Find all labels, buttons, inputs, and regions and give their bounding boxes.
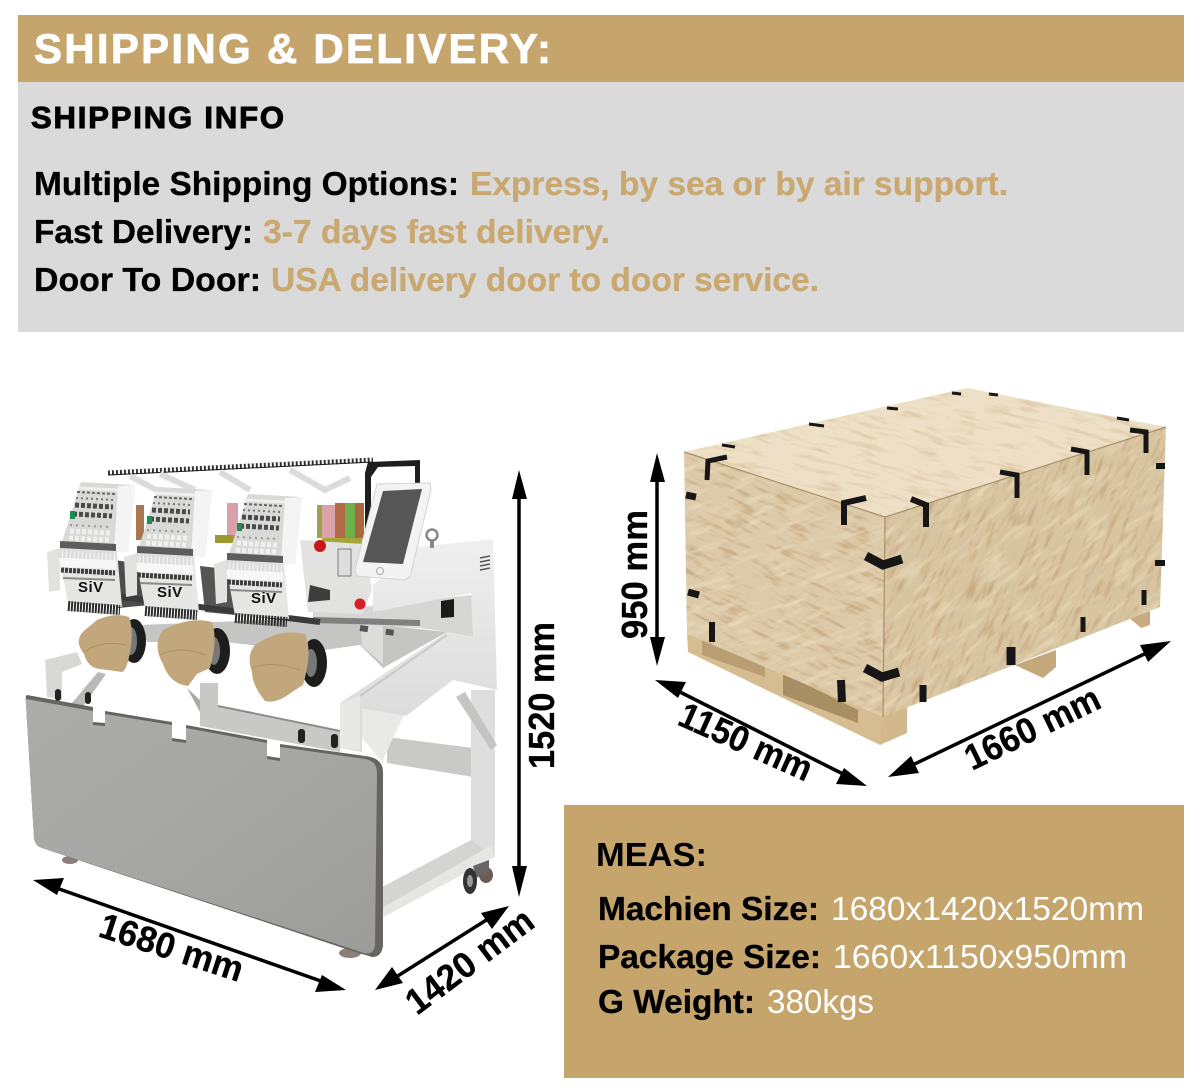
machine right housing bbox=[140, 530, 497, 750]
arrow: height 1520 bbox=[512, 470, 527, 897]
text: gross weight: G Weight: bbox=[598, 983, 755, 1020]
label: 1150 mm: 1150 mm bbox=[673, 694, 819, 789]
title: SHIPPING & DELIVERY: bbox=[34, 25, 551, 72]
text: package size: Package Size: bbox=[598, 938, 821, 975]
caster bbox=[463, 860, 493, 894]
centre gantry bbox=[114, 540, 372, 622]
panel: shipping info bbox=[18, 82, 1184, 332]
text: gross weight: 380kgs bbox=[767, 983, 874, 1020]
text: door to door bbox=[34, 261, 819, 298]
sewing head 3: SiV bbox=[251, 590, 277, 607]
crate edges bbox=[684, 427, 1166, 717]
arrow: crate depth 1150 bbox=[655, 680, 867, 786]
text: door to door: Door To Door: bbox=[34, 261, 261, 298]
machine lower frame bbox=[45, 652, 497, 958]
heading: meas: MEAS: bbox=[596, 836, 707, 873]
crate left face bbox=[684, 452, 885, 717]
thread spools bbox=[136, 503, 364, 544]
label: 1660 mm: 1660 mm bbox=[958, 677, 1107, 778]
sewing head 1: SiV bbox=[78, 579, 104, 596]
pallet feet bbox=[687, 605, 1150, 745]
text: gross weight bbox=[598, 983, 874, 1020]
label: 1680 mm: 1680 mm bbox=[95, 905, 249, 990]
touch screen bbox=[355, 483, 431, 580]
sewing head 3 bbox=[214, 494, 302, 622]
arrow: crate height 950 bbox=[650, 453, 665, 666]
text: door to door: USA delivery door to door service. bbox=[271, 261, 819, 298]
sewing head 2 bbox=[124, 487, 212, 615]
label: 1520 mm: 1520 mm bbox=[521, 622, 562, 769]
illustration: embroidery machine bbox=[26, 460, 497, 958]
folding work table bbox=[26, 695, 383, 957]
text: fast delivery: 3-7 days fast delivery. bbox=[263, 213, 610, 250]
text: fast delivery bbox=[34, 213, 610, 250]
arrow: crate length 1660 bbox=[888, 641, 1171, 777]
text: machine size bbox=[598, 890, 1144, 927]
text: multiple shipping options: Express, by sea or by air support. bbox=[470, 165, 1008, 202]
black clips bbox=[686, 393, 1165, 702]
sewing head 2: SiV bbox=[157, 584, 183, 601]
illustration: wooden crate bbox=[684, 388, 1166, 745]
crate right face bbox=[883, 427, 1166, 717]
text: machine size: Machien Size: bbox=[598, 890, 819, 927]
arrow: depth 1420 bbox=[375, 906, 509, 990]
heading: shipping info: SHIPPING INFO bbox=[31, 100, 284, 135]
text: package size: 1660x1150x950mm bbox=[833, 938, 1127, 975]
label: 1420 mm: 1420 mm bbox=[397, 899, 542, 1022]
text: machine size: 1680x1420x1520mm bbox=[831, 890, 1144, 927]
osb texture bbox=[684, 391, 1166, 714]
sewing head 1 bbox=[47, 482, 135, 610]
text: multiple shipping options bbox=[34, 165, 1008, 202]
panel: measurements bbox=[564, 805, 1184, 1078]
header band bbox=[18, 15, 1184, 82]
text: package size bbox=[598, 938, 1127, 975]
arrow: width 1680 bbox=[33, 878, 346, 992]
text: fast delivery: Fast Delivery: bbox=[34, 213, 253, 250]
crate top face bbox=[684, 388, 1166, 517]
cap frames bbox=[79, 615, 327, 702]
text: multiple shipping options: Multiple Shipping Options: bbox=[34, 165, 459, 202]
label: 950 mm: 950 mm bbox=[614, 510, 655, 639]
thread rail and black frame bbox=[108, 460, 420, 540]
